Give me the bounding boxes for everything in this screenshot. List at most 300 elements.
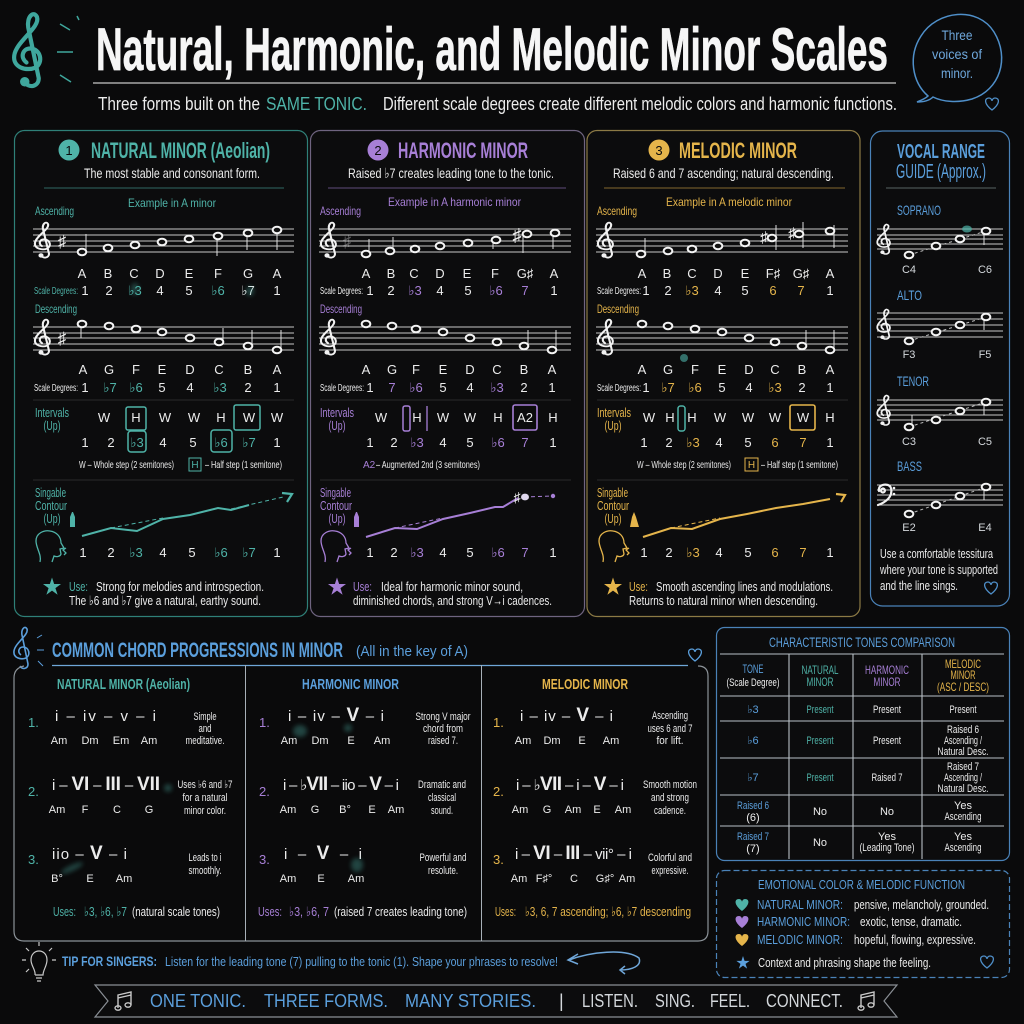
descending note names: E <box>718 362 727 377</box>
column: harmonic minor chords: Uses: <box>258 904 282 919</box>
ascending scale degrees: 1 <box>642 283 650 298</box>
ascending scale degrees: 1 <box>81 283 89 298</box>
banner text blue <box>150 991 536 1011</box>
intervals: H <box>493 410 503 425</box>
table rows: (7) <box>746 843 760 855</box>
icon: music notes left <box>115 992 131 1010</box>
ascending note names: C <box>687 266 697 281</box>
descending note names: G <box>104 362 114 377</box>
column: melodic minor chords: G <box>543 804 551 816</box>
ascending scale degrees: 1 <box>273 283 281 298</box>
descending staff: Descending <box>35 302 77 316</box>
intervals: ♭7 <box>242 435 256 450</box>
use note <box>43 578 264 608</box>
ascending note names: G♯ <box>517 266 533 281</box>
heading <box>896 141 986 183</box>
singable contour: (Up) <box>328 511 346 526</box>
intervals: 1 <box>81 435 89 450</box>
column: harmonic minor chords: Powerful and <box>420 852 466 864</box>
legend: natural minor <box>736 897 989 912</box>
intervals <box>597 405 835 450</box>
intervals: W <box>742 410 755 425</box>
singable contour <box>35 485 292 562</box>
ascending scale degrees: 4 <box>436 283 444 298</box>
use note <box>328 578 552 608</box>
table rows: Natural Desc. <box>938 746 988 758</box>
singable contour: 4 <box>159 545 167 560</box>
ascending note names: A <box>550 266 559 281</box>
descending note names: D <box>465 362 475 377</box>
ascending note names: B <box>387 266 395 281</box>
descending scale degrees: Scale Degrees: <box>34 383 78 394</box>
singable contour: 7 <box>799 545 807 560</box>
step legend: – Half step (1 semitone) <box>761 460 838 471</box>
column: natural minor chords: Em <box>113 735 129 747</box>
ascending scale degrees: 4 <box>156 283 164 298</box>
subtitle <box>98 94 897 114</box>
legend: harmonic minor: exotic, tense, dramatic. <box>860 914 962 929</box>
descending scale degrees: ♭6 <box>688 380 702 395</box>
heading: melodic minor <box>648 138 797 163</box>
column: natural minor chords: F <box>82 804 89 816</box>
ascending note names: G♯ <box>793 266 809 281</box>
intervals: 1 <box>549 435 557 450</box>
column: natural minor chords: G <box>145 804 153 816</box>
heading: natural minor: 1 <box>65 143 73 158</box>
table header: TONE <box>742 662 764 676</box>
column: melodic minor chords: Am <box>515 735 531 747</box>
descending note names: B <box>244 362 252 377</box>
column: natural minor chords: Leads to i <box>188 852 222 864</box>
singable contour: ♭7 <box>242 545 256 560</box>
intervals: H <box>412 410 422 425</box>
column: natural minor chords: i – iv – v – i <box>55 708 156 725</box>
tip for singers: Listen for the leading tone (7) pulling to the tonic (1). Shape your phrases to resolve! <box>165 954 558 969</box>
step legend: W – Whole step (2 semitones) <box>637 460 731 471</box>
bass range: E4 <box>978 522 992 534</box>
table rows: Present <box>806 735 834 747</box>
description: Raised 6 and 7 ascending; natural descending. <box>613 165 834 181</box>
intervals: 7 <box>799 435 807 450</box>
banner text white: LISTEN. <box>582 991 638 1011</box>
descending note names: B <box>798 362 806 377</box>
intervals: 5 <box>466 435 474 450</box>
descending note names: B <box>520 362 528 377</box>
singable contour: ♯ <box>514 489 522 505</box>
intervals: H <box>687 410 697 425</box>
column: natural minor chords: Dm <box>81 735 99 747</box>
soprano range: C4 <box>902 264 916 276</box>
column: melodic minor chords: cadence. <box>654 805 686 817</box>
intervals: W <box>437 410 450 425</box>
singable contour: Contour <box>320 498 352 513</box>
singable contour: 1 <box>79 545 87 560</box>
column: melodic minor chords: G♯° <box>596 873 614 885</box>
column: natural minor chords: NATURAL MINOR (Aeolian) <box>57 676 190 693</box>
intervals: 1 <box>273 435 281 450</box>
intervals: 1 <box>366 435 374 450</box>
table rows: Yes <box>954 831 972 843</box>
intervals: Intervals <box>35 405 69 420</box>
subtitle: SAME TONIC. <box>266 94 367 114</box>
column: natural minor chords: 2. <box>28 784 39 799</box>
column: melodic minor chords: i – ♭VII – i – V – i <box>516 774 624 795</box>
singable contour: 1 <box>273 545 281 560</box>
singable contour: 5 <box>188 545 196 560</box>
use note: diminished chords, and strong V→i cadences. <box>353 593 552 608</box>
table header: HARMONIC <box>865 663 909 677</box>
step legend: A2 <box>363 460 376 471</box>
banner text white: CONNECT. <box>766 991 843 1011</box>
tip for singers: TIP FOR SINGERS: <box>62 953 157 969</box>
descending scale degrees: 2 <box>798 380 806 395</box>
intervals: W <box>375 410 388 425</box>
table rows: ♭6 <box>747 735 759 747</box>
column: harmonic minor chords: sound. <box>431 805 453 817</box>
column: harmonic minor chords: 1. <box>259 715 270 730</box>
ascending note names: D <box>713 266 723 281</box>
tenor range <box>877 373 1003 448</box>
tenor range: TENOR <box>897 373 929 389</box>
intervals: 2 <box>390 435 398 450</box>
singable contour: Contour <box>597 498 629 513</box>
table header <box>726 657 989 694</box>
singable contour: ♭6 <box>491 545 505 560</box>
column: melodic minor chords: 3. <box>493 852 504 867</box>
table rows: Yes <box>878 831 896 843</box>
column: harmonic minor chords: i – iv – V – i <box>288 705 384 726</box>
descending scale degrees: 1 <box>81 380 89 395</box>
column: melodic minor chords: uses 6 and 7 <box>648 723 692 735</box>
panel: melodic minor <box>587 130 860 616</box>
singable contour: (Up) <box>44 511 60 526</box>
use note: Returns to natural minor when descending. <box>629 593 818 608</box>
ascending scale degrees: ♭3 <box>128 283 142 298</box>
table rows: ♭7 <box>747 772 759 784</box>
alto range: ALTO <box>897 287 922 303</box>
descending staff: ♯ <box>58 329 67 348</box>
singable contour: 5 <box>744 545 752 560</box>
singable contour: 1 <box>549 545 557 560</box>
intervals: W <box>159 410 172 425</box>
table rows: (Leading Tone) <box>860 842 914 854</box>
ascending note names: A <box>78 266 87 281</box>
ascending scale degrees: 2 <box>664 283 672 298</box>
descending scale degrees <box>597 380 834 395</box>
legend: harmonic minor: HARMONIC MINOR: <box>757 914 850 929</box>
ascending scale degrees: 5 <box>185 283 193 298</box>
ascending scale degrees: 1 <box>826 283 834 298</box>
column: natural minor chords: Am <box>116 873 132 885</box>
banner text white <box>559 991 843 1011</box>
intervals: H <box>548 410 558 425</box>
column: natural minor chords: meditative. <box>186 735 224 747</box>
intervals: W <box>769 410 782 425</box>
descending scale degrees: 5 <box>439 380 447 395</box>
descending note names: D <box>744 362 754 377</box>
column: natural minor chords: Am <box>141 735 157 747</box>
ascending staff: ♯ <box>58 232 67 251</box>
banner text blue: MANY STORIES. <box>405 991 536 1011</box>
panel heading: EMOTIONAL COLOR & MELODIC FUNCTION <box>758 877 965 892</box>
column: natural minor chords: 1. <box>28 715 39 730</box>
singable contour: ♭6 <box>214 545 228 560</box>
descending note names: E <box>158 362 167 377</box>
ascending note names: D <box>155 266 165 281</box>
step legend: W – Whole step (2 semitones) <box>79 460 174 471</box>
intervals: 7 <box>521 435 529 450</box>
ascending scale degrees: ♭6 <box>489 283 503 298</box>
column: melodic minor chords: 1. <box>493 715 504 730</box>
legend: harmonic minor <box>736 914 962 929</box>
ascending staff: Ascending <box>35 204 74 218</box>
intervals: W <box>98 410 111 425</box>
table rows: Ascending / <box>944 772 983 784</box>
column: natural minor chords: E <box>86 873 94 885</box>
column: melodic minor chords: and strong <box>651 792 689 804</box>
table header: (ASC / DESC) <box>937 680 989 694</box>
intervals: H <box>131 410 141 425</box>
ascending scale degrees: 1 <box>366 283 374 298</box>
column: harmonic minor chords: chord from <box>423 723 463 735</box>
ascending note names: F <box>214 266 222 281</box>
descending note names: G <box>663 362 673 377</box>
subtitle: Three forms built on the <box>98 94 260 114</box>
icon: music notes right <box>858 992 874 1010</box>
column: melodic minor chords: Am <box>619 873 635 885</box>
ascending scale degrees: Scale Degrees: <box>320 286 363 297</box>
column: harmonic minor chords: i – V – i <box>284 843 362 864</box>
descending scale degrees <box>34 380 281 395</box>
ascending scale degrees: ♭7 <box>241 283 255 298</box>
descending scale degrees: ♭3 <box>213 380 227 395</box>
descending note names: E <box>439 362 448 377</box>
column: harmonic minor chords: Am <box>280 804 296 816</box>
ascending scale degrees <box>597 283 834 298</box>
ascending scale degrees: Scale Degrees: <box>34 286 78 297</box>
singable contour: 1 <box>640 545 648 560</box>
icon: heart <box>985 582 997 594</box>
intervals <box>320 405 558 450</box>
banner text white: | <box>559 991 564 1011</box>
tessitura note <box>879 546 998 593</box>
column: natural minor chords: (natural scale tones) <box>132 904 220 919</box>
descending note names: C <box>770 362 780 377</box>
table rows: Ascending <box>944 842 982 854</box>
column: harmonic minor chords: classical <box>428 792 456 804</box>
tip for singers <box>22 942 640 981</box>
singable contour: 1 <box>826 545 834 560</box>
step legend: – Augmented 2nd (3 semitones) <box>376 460 480 471</box>
column: natural minor chords: 3. <box>28 852 39 867</box>
column: melodic minor chords: Am <box>512 804 528 816</box>
column: melodic minor chords: MELODIC MINOR <box>542 676 628 693</box>
table header: MINOR <box>806 675 834 689</box>
column: harmonic minor chords: Am <box>280 873 296 885</box>
column: melodic minor chords: Ascending <box>652 710 688 722</box>
descending note names: A <box>826 362 835 377</box>
table rows: No <box>813 837 827 849</box>
ascending note names: A <box>273 266 282 281</box>
ascending note names: E <box>741 266 750 281</box>
intervals: W <box>714 410 727 425</box>
section heading: chord progressions <box>14 627 701 668</box>
column: harmonic minor chords: E <box>317 873 325 885</box>
ascending note names: B <box>663 266 671 281</box>
description: The most stable and consonant form. <box>84 165 260 181</box>
descending staff <box>596 302 848 362</box>
intervals: A2 <box>517 410 533 425</box>
example label: Example in A harmonic minor <box>388 195 521 209</box>
ascending staff: ♯ <box>788 225 796 242</box>
column: harmonic minor chords: E <box>368 804 376 816</box>
intervals: W <box>243 410 256 425</box>
column: melodic minor chords: Am <box>603 735 619 747</box>
bass range <box>877 458 1003 534</box>
column: melodic minor chords: E <box>593 804 601 816</box>
column: natural minor chords: B° <box>51 873 63 885</box>
callout: three voices of minor: voices of <box>932 46 982 62</box>
ascending scale degrees: 5 <box>464 283 472 298</box>
column: melodic minor chords: Uses: <box>495 904 516 919</box>
column: melodic minor chords <box>493 676 697 919</box>
singable contour: 5 <box>466 545 474 560</box>
ascending note names: G <box>243 266 253 281</box>
heading: natural minor <box>58 138 270 163</box>
step legend <box>637 458 838 471</box>
intervals: (Up) <box>604 418 622 433</box>
intervals: 4 <box>159 435 167 450</box>
column: harmonic minor chords: resolute. <box>428 865 458 877</box>
icon: teal treble clef with sparks <box>14 14 79 86</box>
ascending note names: A <box>362 266 371 281</box>
ascending scale degrees: 7 <box>797 283 805 298</box>
descending scale degrees: ♭6 <box>409 380 423 395</box>
ascending staff: ♯ <box>512 225 522 245</box>
column: natural minor chords: C <box>113 804 121 816</box>
descending scale degrees: ♭6 <box>129 380 143 395</box>
example label: Example in A minor <box>128 196 216 210</box>
heading: harmonic minor <box>368 138 528 163</box>
descending staff: Descending <box>597 302 639 316</box>
column: natural minor chords: Uses ♭6 and ♭7 <box>178 779 232 791</box>
descending scale degrees: 7 <box>388 380 396 395</box>
ascending note names: C <box>409 266 419 281</box>
panel: emotional color and melodic function <box>716 870 1010 978</box>
singable contour: 6 <box>771 545 779 560</box>
descending scale degrees: 4 <box>186 380 194 395</box>
soprano range: C6 <box>978 264 992 276</box>
ascending scale degrees: ♭3 <box>408 283 422 298</box>
context note: Context and phrasing shape the feeling. <box>758 955 931 970</box>
ascending scale degrees <box>320 283 558 298</box>
descending note names: C <box>214 362 224 377</box>
column: harmonic minor chords: Dramatic and <box>418 779 466 791</box>
ascending scale degrees: Scale Degrees: <box>597 286 641 297</box>
ascending scale degrees: 6 <box>769 283 777 298</box>
intervals: 4 <box>439 435 447 450</box>
descending staff <box>33 302 294 355</box>
ascending staff: ♯ <box>760 229 768 246</box>
intervals: 1 <box>640 435 648 450</box>
column: melodic minor chords: Am <box>565 804 581 816</box>
descending scale degrees: ♭7 <box>661 380 675 395</box>
intervals: W <box>643 410 656 425</box>
step legend <box>363 460 480 471</box>
column: harmonic minor chords: Dm <box>311 735 329 747</box>
heading: melodic minor: 3 <box>655 143 663 158</box>
intervals: Intervals <box>597 405 631 420</box>
column: melodic minor chords: E <box>578 735 586 747</box>
table rows: Raised 6 <box>737 800 769 812</box>
singable contour <box>597 485 845 562</box>
tessitura note: and the line sings. <box>880 578 958 593</box>
ascending note names: D <box>435 266 445 281</box>
intervals <box>35 405 284 452</box>
table rows: Ascending <box>944 811 982 823</box>
intervals: 2 <box>665 435 673 450</box>
alto range: F3 <box>903 349 915 361</box>
column: melodic minor chords: expressive. <box>652 865 688 877</box>
descending scale degrees: 4 <box>466 380 474 395</box>
column: harmonic minor chords <box>258 676 471 919</box>
banner text blue: ONE TONIC. <box>150 991 246 1011</box>
descending staff <box>319 302 571 355</box>
title underline <box>93 82 896 84</box>
table rows: Raised 7 <box>947 761 979 773</box>
descending note names: G <box>387 362 397 377</box>
ascending note names: E <box>185 266 194 281</box>
column: harmonic minor chords: Am <box>281 735 297 747</box>
ascending note names: A <box>638 266 647 281</box>
descending scale degrees: 2 <box>520 380 528 395</box>
column: harmonic minor chords: ♭3, ♭6, 7 <box>289 904 329 919</box>
ascending note names: B <box>104 266 112 281</box>
column: harmonic minor chords: (raised 7 creates leading tone) <box>334 904 467 919</box>
table rows: No <box>813 806 827 818</box>
step legend <box>79 458 282 471</box>
banner text white: SING. <box>655 991 695 1011</box>
singable contour: ♭3 <box>686 545 700 560</box>
ascending scale degrees: 4 <box>714 283 722 298</box>
column: harmonic minor chords: 3. <box>259 852 270 867</box>
ascending scale degrees: 2 <box>105 283 113 298</box>
column: melodic minor chords: F♯° <box>536 873 552 885</box>
column: harmonic minor chords: i – ♭VII – iio – V – i <box>283 774 399 795</box>
tenor range: C3 <box>902 436 916 448</box>
column: harmonic minor chords: E <box>347 735 355 747</box>
column: melodic minor chords: i – iv – V – i <box>520 705 613 726</box>
singable contour: 4 <box>439 545 447 560</box>
column: harmonic minor chords: 2. <box>259 784 270 799</box>
descending note names: F <box>412 362 420 377</box>
table rows: Raised 7 <box>737 831 769 843</box>
table rows: (6) <box>746 812 760 824</box>
alto range: F5 <box>979 349 991 361</box>
column: natural minor chords: iio – V – i <box>52 843 127 864</box>
ascending staff <box>319 204 571 258</box>
intervals: W <box>271 410 284 425</box>
ascending note names: E <box>463 266 472 281</box>
intervals: H <box>665 410 675 425</box>
column: harmonic minor chords: Am <box>348 873 364 885</box>
column: natural minor chords: smoothly. <box>188 865 222 877</box>
ascending scale degrees: ♭3 <box>685 283 699 298</box>
singable contour <box>320 485 557 562</box>
subtitle: Different scale degrees create different melodic colors and harmonic functions. <box>383 94 897 114</box>
use note: Use: <box>69 579 88 594</box>
column: melodic minor chords: i – VI – III – vii° – i <box>515 843 632 864</box>
